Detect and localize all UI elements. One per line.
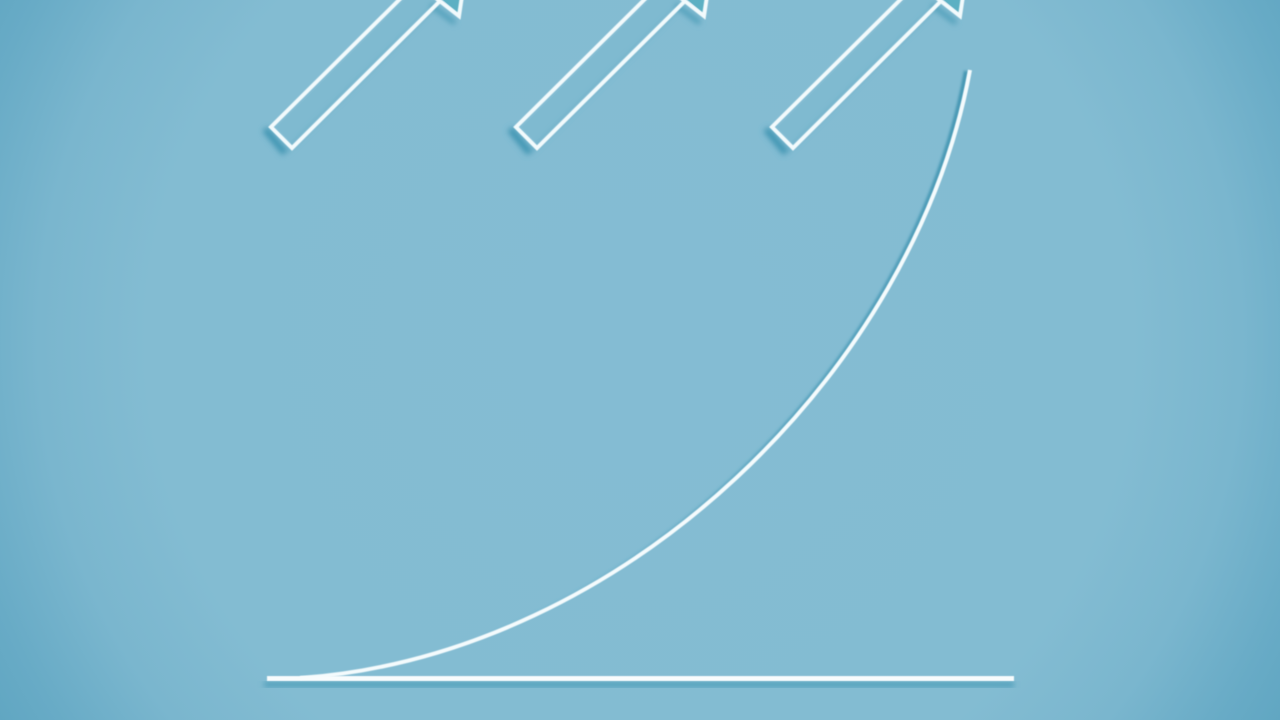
arrow 2 [510,0,707,153]
arrow 3 [766,0,963,153]
baseline axis [264,676,1014,687]
growth curve [296,70,970,679]
arrow 1 [265,0,462,153]
